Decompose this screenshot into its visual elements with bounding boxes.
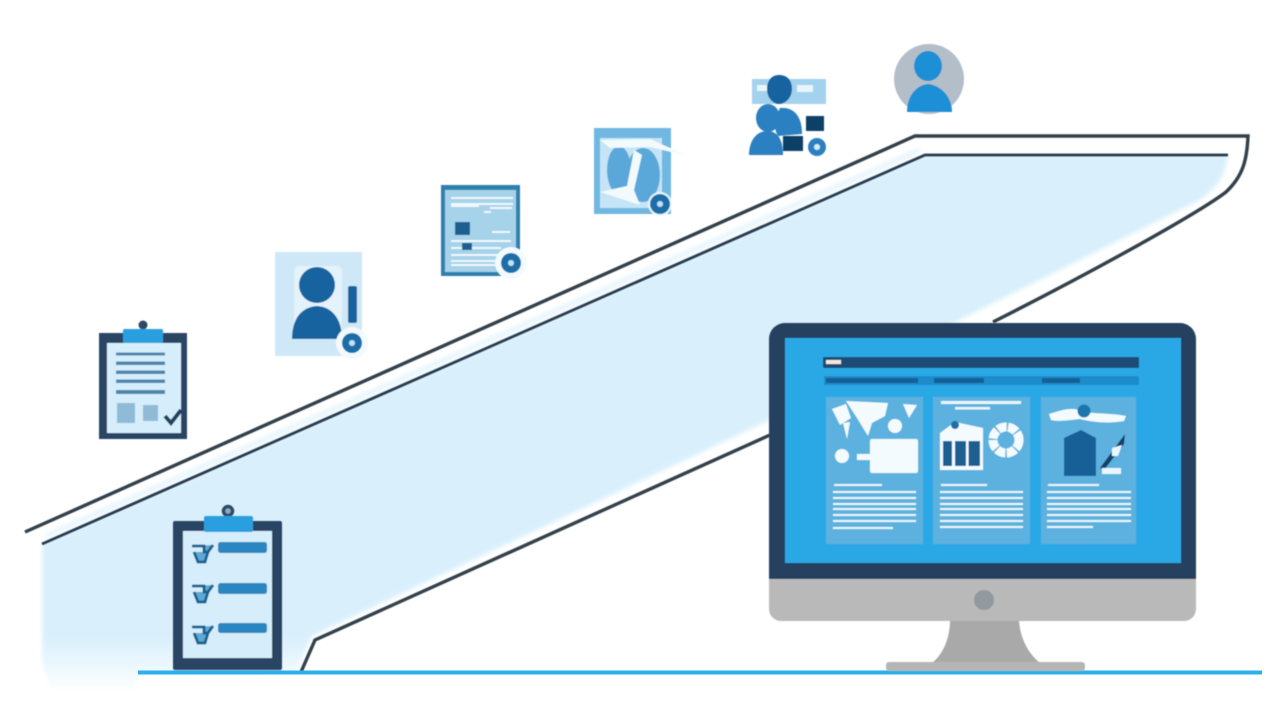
monitor bezel [769, 323, 1196, 579]
screen panel: signing [1041, 397, 1136, 544]
monitor chin [769, 570, 1196, 621]
monitor [769, 323, 1196, 671]
staircase pale edge band [46, 150, 920, 536]
icon: checklist clipboard on the floor [173, 506, 282, 670]
icon: profile card [275, 252, 368, 359]
staircase lower outline [301, 435, 770, 672]
staircase outer outline [25, 136, 1248, 532]
monitor button [974, 590, 994, 610]
screen panel: building [933, 397, 1030, 544]
monitor base [886, 662, 1085, 671]
icon: map card [594, 128, 688, 216]
monitor stand [932, 620, 1040, 663]
floor line [138, 670, 1262, 674]
icon: user avatar [894, 44, 964, 114]
icon: team group [749, 75, 826, 156]
screen panel: map [826, 397, 923, 544]
monitor screen [785, 338, 1181, 563]
screen header bar [823, 357, 1139, 368]
icon: form clipboard [99, 320, 187, 439]
icon: document with badge [441, 185, 527, 279]
staircase ramp fill [42, 155, 1228, 692]
staircase inner outline [42, 155, 1228, 544]
screen sub-header bar [824, 376, 1139, 385]
